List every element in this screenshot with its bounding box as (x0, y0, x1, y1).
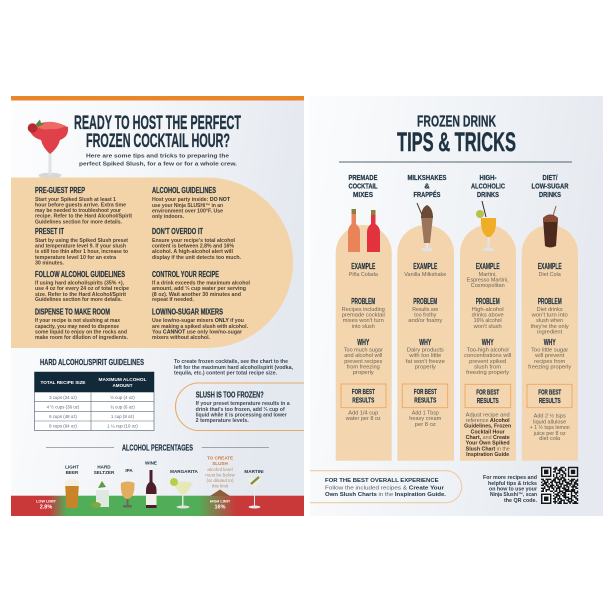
column headers: MIXES (353, 190, 373, 199)
column headers: DRINKS (539, 190, 561, 199)
column: diet/low-sugar drinks: Add 2 ½ tsps (534, 412, 566, 420)
tip: control your recipe: If a drink exceeds the maximum alcohol (152, 280, 251, 286)
note: to create slush: this limit (212, 484, 229, 488)
column: high-alcoholic drinks: Martini, (479, 272, 497, 278)
column: diet/low-sugar drinks: ingredient (537, 330, 563, 336)
note: to create slush: SLUSH (212, 461, 228, 466)
tip: low/no-sugar mixers: are making a spiked slush with alcohol. (152, 324, 249, 330)
drink labels: MARTINI (244, 469, 264, 474)
column: diet/low-sugar drinks: slush when (536, 318, 563, 324)
icon: cola slush (543, 206, 558, 248)
title: TIPS & TRICKS (397, 127, 516, 157)
column: premade cocktail mixes: into slush (352, 324, 375, 330)
title (74, 112, 241, 152)
column: milkshakes and frappes: too frothy (414, 312, 437, 318)
note: to create slush: (or diluted to) (206, 478, 234, 483)
tip: dispense to make room: make room for dilution of ingredients. (35, 335, 129, 341)
text: scan the qr code: For more recipes and (483, 475, 537, 481)
tip: don't overdo it: alcohol. A high-alcohol alert will (152, 249, 234, 255)
column: high-alcoholic drinks: 16% alcohol (474, 318, 502, 324)
tip: low/no-sugar mixers (152, 308, 249, 341)
icon: wine bottle (146, 470, 156, 508)
column: milkshakes and frappes: per 8 oz (415, 422, 436, 428)
column: diet/low-sugar drinks: juice per 8 oz (533, 431, 566, 437)
table: maximum alcohol amount: 1 cup (8 oz) (111, 414, 135, 419)
column: diet/low-sugar drinks: RESULTS (539, 396, 561, 405)
icon: margarita (170, 478, 193, 508)
column: milkshakes and frappes: properly (415, 364, 436, 370)
column headers: DIET/ (542, 173, 558, 182)
tip: preset it: PRESET IT (35, 227, 64, 236)
tip: pre-guest prep: recipe. Refer to the Hard Alcohol/Spirit (35, 214, 132, 220)
column: diet/low-sugar drinks: WHY (544, 338, 556, 347)
tip: don't overdo it: content is between 2.8% and 16% (152, 244, 235, 250)
table: maximum alcohol amount: AMOUNT (112, 383, 133, 388)
tip: pre-guest prep: Guidelines section for more details. (35, 220, 123, 226)
column: diet/low-sugar drinks (522, 206, 578, 461)
column: premade cocktail mixes: and alcohol will (344, 353, 382, 359)
column headers (348, 173, 569, 199)
subtitle: perfect Spiked Slush, for a few or for a whole crew. (79, 162, 237, 168)
column: high-alcoholic drinks: slush from (474, 364, 501, 370)
column: high-alcoholic drinks: PROBLEM (476, 297, 500, 306)
note: to create slush (205, 456, 235, 488)
icon: milkshake (417, 203, 433, 252)
column: milkshakes and frappes: Dairy products (407, 348, 444, 354)
drink labels: MARGARITA (170, 469, 199, 474)
callout: best overall experience: Follow the included recipes & Create Your (325, 486, 444, 492)
tip: alcohol guidelines: ALCOHOL GUIDELINES (152, 186, 216, 195)
title: FROZEN COCKTAIL HOUR? (86, 130, 230, 152)
subtitle: Here are some tips and tricks to preparing the (86, 154, 230, 160)
tip: alcohol guidelines: Host your party inside: DO NOT (152, 197, 230, 203)
column: diet/low-sugar drinks: Too little sugar (531, 348, 569, 354)
icon: tropical drink (476, 201, 496, 251)
low limit: 2.8% (40, 504, 52, 510)
icon: bottles (348, 209, 380, 252)
heading: hard alcohol/spirit guidelines: HARD ALCOHOL/SPIRIT GUIDELINES (40, 357, 144, 367)
table: maximum alcohol amount: 6 cups (48 oz) (49, 414, 77, 419)
icon: hard seltzer (91, 481, 109, 508)
column: high-alcoholic drinks: High-alcohol (472, 307, 504, 313)
column: high-alcoholic drinks: Adjust recipe and (466, 412, 510, 418)
column: milkshakes and frappes (397, 203, 454, 461)
column: diet/low-sugar drinks: Diet Cola (539, 272, 561, 278)
column: premade cocktail mixes: WHY (357, 338, 370, 347)
column headers: FRAPPÉS (414, 190, 440, 199)
orange top bar (11, 96, 304, 100)
column: premade cocktail mixes: water per 8 oz (346, 416, 381, 422)
tip: alcohol guidelines: only indoors. (152, 214, 185, 220)
drink labels (65, 460, 264, 475)
tip: preset it: and temperature level 9. If your slush (35, 244, 126, 250)
drink labels: HARD (97, 464, 111, 470)
column: high-alcoholic drinks: Cosmopolitan (471, 283, 505, 289)
icon: martini (246, 477, 262, 508)
callout: best overall experience (310, 471, 462, 503)
tip: low/no-sugar mixers: You CANNOT use only low/no-sugar (152, 330, 242, 336)
tip: pre-guest prep: PRE-GUEST PREP (35, 186, 85, 195)
column: high-alcoholic drinks (460, 201, 516, 461)
drink labels: BEER (66, 470, 79, 475)
high limit: 16% (214, 504, 226, 510)
callout: slush is too frozen: SLUSH IS TOO FROZEN? (196, 390, 264, 400)
column: high-alcoholic drinks: Cocktail Hour (471, 429, 505, 435)
table: maximum alcohol amount (34, 372, 154, 430)
column: diet/low-sugar drinks: won't turn into (532, 312, 568, 318)
table: maximum alcohol amount: ¾ cup (6 oz) (110, 404, 135, 409)
right page (310, 96, 603, 516)
table: maximum alcohol amount: TOTAL RECIPE SIZE (40, 380, 86, 385)
tip: preset it: is still too thin after 1 hour, increase to (35, 249, 128, 255)
column: high-alcoholic drinks: concentrations will (464, 353, 511, 359)
tip: preset it: Start by using the Spiked Slush preset (35, 238, 128, 244)
high limit: HIGH LIMIT (210, 500, 231, 504)
title: READY TO HOST THE PERFECT (74, 112, 241, 134)
callout: slush is too frozen: liquid while it is processing and lower (196, 412, 287, 418)
drink labels: WINE (145, 460, 157, 466)
tip: pre-guest prep: Start your Spiked Slush at least 1 (35, 197, 116, 203)
tip: control your recipe: repeat if needed. (152, 297, 195, 303)
column: diet/low-sugar drinks: EXAMPLE (538, 262, 562, 271)
column: diet/low-sugar drinks: liquid allulose (533, 420, 566, 426)
note: to create slush: alcohol level (207, 467, 233, 472)
column headers: HIGH- (480, 173, 497, 182)
column: high-alcoholic drinks: RESULTS (477, 396, 499, 405)
limit marker (210, 490, 230, 496)
column: high-alcoholic drinks: Chart, and Create (466, 435, 510, 441)
column: diet/low-sugar drinks: will prevent (535, 353, 565, 359)
tip: pre-guest prep: hour before guests arrive. Extra time (35, 203, 126, 209)
tip: don't overdo it: DON'T OVERDO IT (152, 227, 203, 236)
text: chart explanation (174, 359, 294, 376)
chart: alcohol percentages (11, 442, 304, 516)
tip: follow alcohol guidelines: use 4 oz for every 24 oz of total recipe (35, 286, 129, 292)
icon: qr code (541, 467, 578, 504)
tip: control your recipe: (8 oz). Wait another 30 minutes and (152, 292, 241, 298)
chart heading: ALCOHOL PERCENTAGES (122, 442, 193, 452)
column: premade cocktail mixes: Too much sugar (344, 348, 383, 354)
column: premade cocktail mixes: EXAMPLE (351, 262, 376, 271)
column: diet/low-sugar drinks: Diet drinks (537, 307, 563, 313)
tip: follow alcohol guidelines: FOLLOW ALCOHOL GUIDELINES (35, 270, 125, 279)
tip: don't overdo it: Ensure your recipe's total alcohol (152, 238, 236, 244)
panel: tips (11, 178, 293, 348)
tip: preset it: temperature level 10 for an extra (35, 255, 116, 261)
gradient bar (11, 496, 304, 516)
callout: slush is too frozen (175, 383, 304, 430)
title (397, 114, 516, 157)
tip: alcohol guidelines (152, 186, 230, 220)
column: diet/low-sugar drinks: + 1 ½ tsps lemon (530, 424, 570, 431)
low limit: LOW LIMIT (36, 500, 57, 504)
text: scan the qr code: the QR code. (504, 498, 538, 504)
column: milkshakes and frappes: fat won't freeze (406, 359, 445, 365)
tip: control your recipe (152, 270, 251, 303)
tip: dispense to make room: If your recipe is not slushing at max (35, 318, 120, 324)
table: maximum alcohol amount: 8 cups (64 oz) (49, 424, 77, 428)
drink labels: IPA (125, 468, 133, 473)
column: premade cocktail mixes: Piña Colada (349, 272, 378, 278)
column: high-alcoholic drinks: Inspiration Guide (466, 452, 509, 458)
column: diet/low-sugar drinks: they're the only (531, 324, 569, 330)
tip: low/no-sugar mixers: mixers without alcohol. (152, 335, 211, 341)
column: high-alcoholic drinks: reference Alcohol (466, 418, 510, 424)
column: milkshakes and frappes: RESULTS (414, 396, 436, 404)
table: maximum alcohol amount: 1 ¼ cup (10 oz) (107, 424, 138, 428)
column: high-alcoholic drinks: FOR BEST (476, 388, 499, 396)
drink labels: SELTZER (94, 470, 115, 475)
text: chart explanation: To create frozen cocktails, see the chart to the (174, 359, 288, 365)
column: premade cocktail mixes: prevent recipes (344, 359, 383, 365)
column: premade cocktail mixes: RESULTS (352, 396, 374, 404)
tip: control your recipe: amount, add ⅓ cup water per serving (152, 286, 246, 292)
column: premade cocktail mixes: premade cocktail (342, 312, 385, 318)
column headers: PREMADE (348, 173, 378, 182)
column: diet/low-sugar drinks: recipes from (534, 359, 565, 365)
column: milkshakes and frappes: FOR BEST (414, 387, 437, 396)
tip: don't overdo it (152, 227, 242, 261)
table: maximum alcohol amount: 4 ½ cups (36 oz) (47, 404, 80, 409)
column: high-alcoholic drinks: Guidelines, Frozen (464, 424, 511, 430)
callout: best overall experience: Own Slush Charts in the Inspiration Guide. (325, 492, 447, 498)
column: milkshakes and frappes: EXAMPLE (413, 262, 438, 271)
table: maximum alcohol amount: MAXIMUM ALCOHOL (98, 377, 147, 382)
column: milkshakes and frappes: Vanilla Milkshake (404, 272, 447, 278)
column: high-alcoholic drinks: Slush Chart in the (466, 446, 510, 452)
column headers: MILKSHAKES (408, 173, 446, 182)
column: milkshakes and frappes: WHY (419, 338, 432, 347)
tip: alcohol guidelines: use your Ninja SLUSHi™ in an (152, 203, 223, 209)
tip: low/no-sugar mixers: Use low/no-sugar mixers ONLY if you (152, 318, 244, 324)
column: high-alcoholic drinks: WHY (482, 338, 494, 347)
tip: follow alcohol guidelines: If using hard alcohol/spirits (35% +), (35, 280, 125, 286)
column: diet/low-sugar drinks: PROBLEM (538, 297, 562, 306)
high limit (210, 500, 231, 510)
text: scan the qr code: Ninja Slushi™, scan (490, 492, 537, 498)
column: premade cocktail mixes (336, 209, 392, 461)
tip: dispense to make room: some liquid to enjoy on the rocks and (35, 330, 127, 336)
icon: light beer (65, 479, 79, 508)
column: high-alcoholic drinks: Too-high alcohol (467, 348, 509, 354)
tip: preset it (35, 227, 128, 266)
left page (11, 96, 304, 516)
column: premade cocktail mixes: properly (353, 370, 374, 376)
column: premade cocktail mixes: from freezing (347, 364, 380, 370)
tip: dispense to make room: DISPENSE TO MAKE ROOM (35, 308, 110, 316)
tip: follow alcohol guidelines: Guidelines section for more details. (35, 297, 123, 303)
column: premade cocktail mixes: FOR BEST (352, 387, 375, 396)
column: milkshakes and frappes: and/or foamy (408, 318, 443, 324)
callout: slush is too frozen: If your preset temperature results in a (196, 401, 290, 407)
note: to create slush: must be below (205, 472, 235, 478)
column: diet/low-sugar drinks: freezing properly (528, 364, 572, 370)
column: premade cocktail mixes: Recipes including (342, 307, 385, 313)
table: maximum alcohol amount: ½ cup (4 oz) (110, 395, 135, 400)
tip: don't overdo it: display if the unit detects too much. (152, 255, 242, 261)
column: milkshakes and frappes: Add 1 Tbsp (412, 410, 439, 416)
note: to create slush: TO CREATE (207, 456, 233, 460)
callout: best overall experience: FOR THE BEST OVERALL EXPERIENCE (325, 478, 439, 484)
table: maximum alcohol amount: 3 cups (24 oz) (49, 395, 77, 400)
title: FROZEN DRINK (417, 114, 496, 130)
tip: alcohol guidelines: environment over 100°F. Use (152, 208, 223, 214)
text: scan the qr code (483, 475, 538, 504)
column: milkshakes and frappes: PROBLEM (413, 297, 438, 306)
text: scan the qr code: helpful tips & tricks (488, 481, 537, 487)
column: premade cocktail mixes: Add 1/4 cup (348, 410, 379, 416)
tip: dispense to make room: capacity, you may need to dispense (35, 324, 119, 330)
column headers: DRINKS (477, 190, 499, 199)
tip: pre-guest prep (35, 186, 132, 226)
subtitle (79, 154, 237, 168)
column: high-alcoholic drinks: Espresso Martini, (467, 278, 509, 284)
column: premade cocktail mixes: mixes won't turn (343, 318, 384, 324)
tip: follow alcohol guidelines (35, 270, 129, 303)
icon: ipa (121, 482, 135, 508)
column headers: ALCOHOLIC (471, 182, 505, 190)
column: milkshakes and frappes: Results are (412, 307, 439, 313)
column headers: COCKTAIL (348, 182, 378, 190)
column headers: & (424, 182, 430, 190)
text: chart explanation: tequila, etc.) content per total recipe size. (174, 370, 278, 376)
column: high-alcoholic drinks: Your Own Spiked (466, 441, 510, 447)
text: scan the qr code: on how to use your (489, 486, 537, 492)
callout: slush is too frozen: drink that's too frozen, add ⅓ cup of (196, 407, 285, 413)
column headers: LOW-SUGAR (532, 182, 569, 190)
column: milkshakes and frappes: heavy cream (409, 416, 441, 422)
tip: pre-guest prep: may be needed to troubleshoot your (35, 208, 121, 214)
callout: slush is too frozen: 2 temperature levels. (196, 418, 249, 424)
icon: strawberry margarita (28, 120, 68, 178)
column: diet/low-sugar drinks: FOR BEST (538, 388, 561, 396)
tip: control your recipe: CONTROL YOUR RECIPE (152, 270, 219, 279)
column: high-alcoholic drinks: freezing properly (466, 370, 510, 376)
column: milkshakes and frappes: with too little (409, 353, 442, 359)
tip: dispense to make room (35, 308, 129, 341)
low limit (36, 500, 57, 510)
column: diet/low-sugar drinks: diet cola (539, 436, 560, 442)
tip: preset it: 30 minutes. (35, 260, 65, 266)
column: high-alcoholic drinks: EXAMPLE (476, 262, 500, 271)
text: chart explanation: left for the maximum hard alcohol/spirit (vodka, (174, 365, 294, 371)
column: high-alcoholic drinks: prevent spiked (469, 359, 506, 365)
tip: low/no-sugar mixers: LOW/NO-SUGAR MIXERS (152, 308, 223, 316)
column: premade cocktail mixes: PROBLEM (351, 297, 376, 306)
tip: follow alcohol guidelines: size. Refer to the Hard Alcohol/Spirit (35, 292, 126, 298)
column: high-alcoholic drinks: won't slush (474, 324, 502, 330)
column: high-alcoholic drinks: drinks above (472, 312, 504, 318)
drink labels: LIGHT (65, 464, 79, 470)
